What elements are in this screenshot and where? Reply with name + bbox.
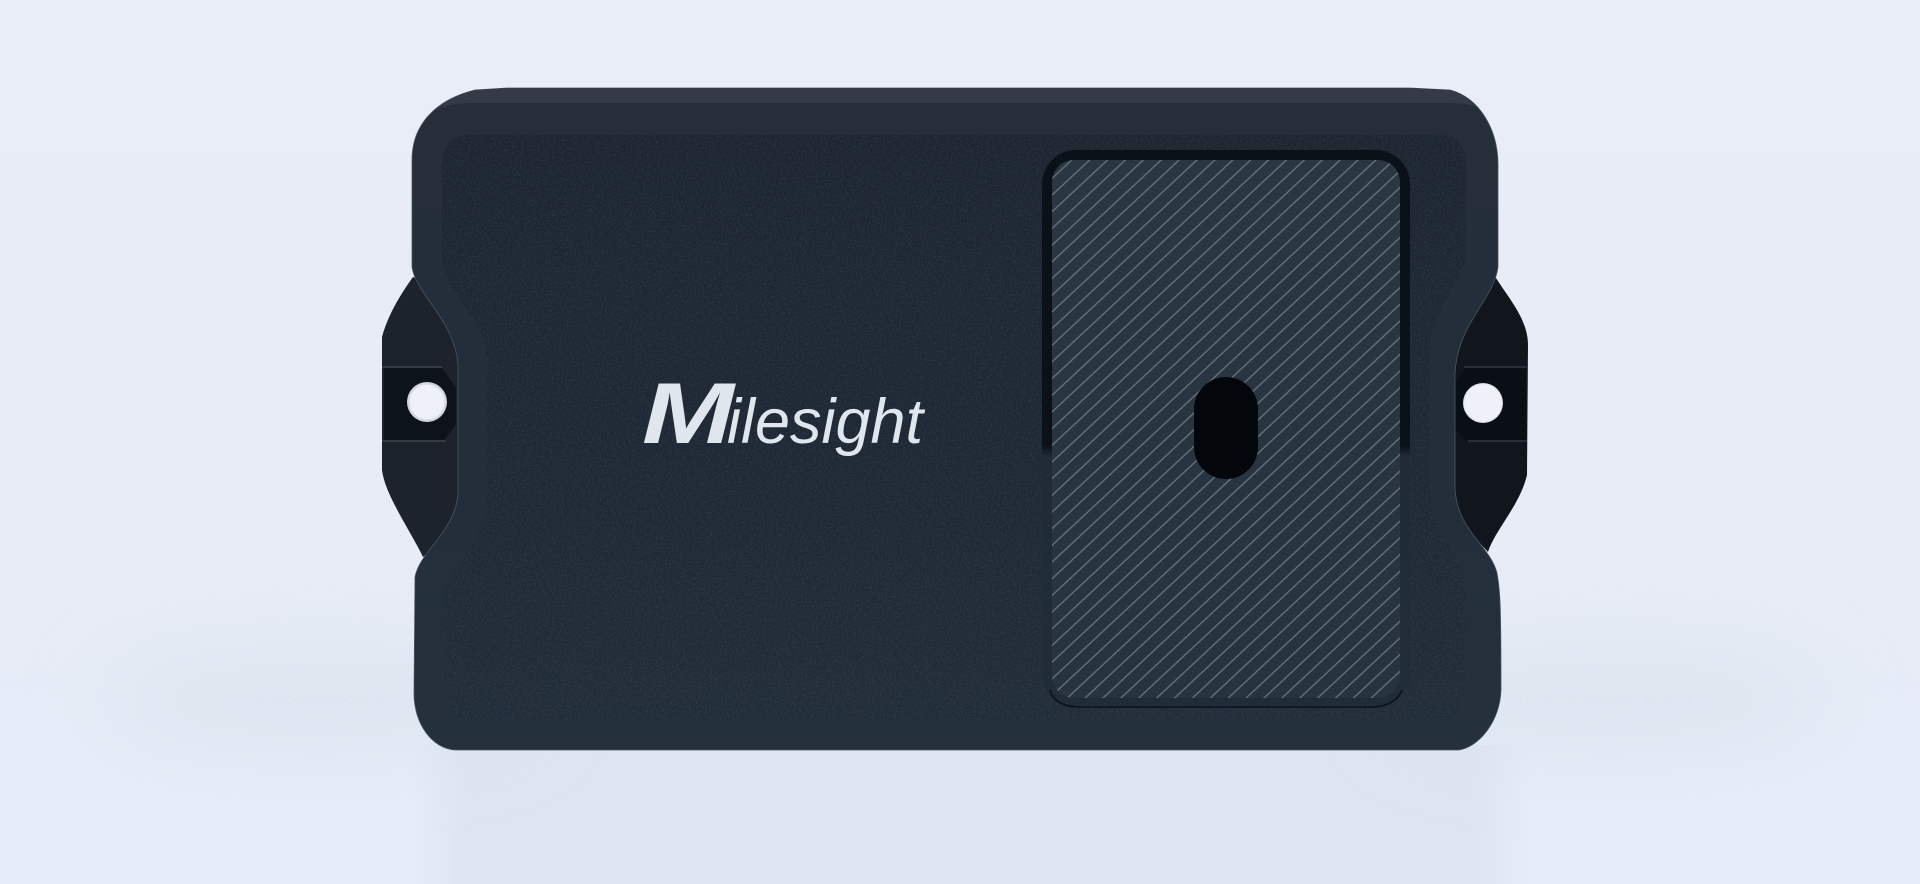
sensor window groove	[1042, 150, 1410, 708]
surface grain	[442, 135, 1466, 720]
sensor opening	[1194, 377, 1258, 479]
recessed face panel	[442, 135, 1466, 720]
mounting ear: right	[1440, 278, 1528, 552]
logo: Milesight: ilesight	[727, 387, 925, 457]
product photo illustration	[172, 88, 1758, 884]
logo: Milesight: M	[642, 366, 737, 462]
striped sensor window	[1052, 160, 1400, 698]
top lip	[434, 88, 1477, 111]
logo: Milesight	[642, 366, 925, 462]
mounting ear: left	[382, 277, 480, 557]
device body	[400, 80, 1510, 750]
floor shadow right	[1390, 650, 1830, 750]
lower window outline	[1050, 690, 1402, 707]
floor shadow left	[100, 650, 540, 750]
floor reflection of device	[410, 745, 1530, 884]
